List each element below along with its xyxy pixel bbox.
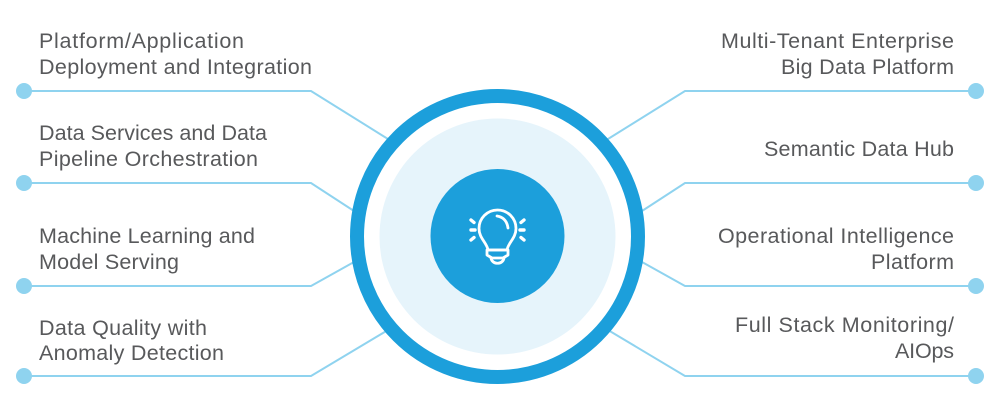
text: Machine Learning and Model Serving: Machine Learning and (39, 224, 255, 248)
text: Operational Intelligence Platform: Platform (871, 250, 954, 274)
text: Multi-Tenant Enterprise Big Data Platform: Big Data Platform (781, 55, 954, 79)
connector: Full Stack Monitoring (608, 330, 984, 384)
connector: Operational Intelligence (642, 262, 984, 294)
text: Data Quality with Anomaly Detection: Data Quality with (39, 316, 207, 340)
text: Data Services and Data Pipeline Orchestration (39, 121, 267, 171)
icon: light bulb (471, 210, 524, 263)
text: Data Services and Data Pipeline Orchestration: Pipeline Orchestration (39, 147, 258, 171)
connector: Semantic Data Hub (642, 175, 984, 211)
text: Full Stack Monitoring/ AIOps: Full Stack Monitoring/ (735, 313, 954, 337)
connector: Multi-Tenant (608, 83, 984, 139)
text: Operational Intelligence Platform: Operational Intelligence (718, 224, 954, 248)
text: Data Quality with Anomaly Detection: Anomaly Detection (39, 341, 224, 365)
text: Machine Learning and Model Serving (39, 224, 255, 274)
text: Data Services and Data Pipeline Orchestration: Data Services and Data (39, 121, 267, 145)
text: Platform/Application Deployment and Integration: Deployment and Integration (39, 55, 312, 79)
text: Platform/Application Deployment and Integration (39, 29, 312, 79)
central disc (430, 169, 564, 303)
text: Machine Learning and Model Serving: Model Serving (39, 250, 179, 274)
outer ring (357, 96, 638, 377)
connector: Machine Learning (16, 262, 354, 294)
connector: Data Quality (16, 330, 388, 384)
text: Multi-Tenant Enterprise Big Data Platform (721, 29, 954, 79)
text: Platform/Application Deployment and Integration: Platform/Application (39, 29, 244, 53)
text: Multi-Tenant Enterprise Big Data Platform: Multi-Tenant Enterprise (721, 29, 954, 53)
text: Full Stack Monitoring/ AIOps: AIOps (895, 339, 954, 363)
connector: Platform/Application Deployment (16, 83, 388, 139)
text: Data Quality with Anomaly Detection (39, 316, 224, 365)
light inner disc (380, 118, 616, 354)
text: Operational Intelligence Platform (718, 224, 954, 274)
text: Semantic Data Hub: Semantic Data Hub (764, 137, 954, 161)
text: Full Stack Monitoring/ AIOps (735, 313, 954, 363)
connector: Data Services (16, 175, 354, 211)
